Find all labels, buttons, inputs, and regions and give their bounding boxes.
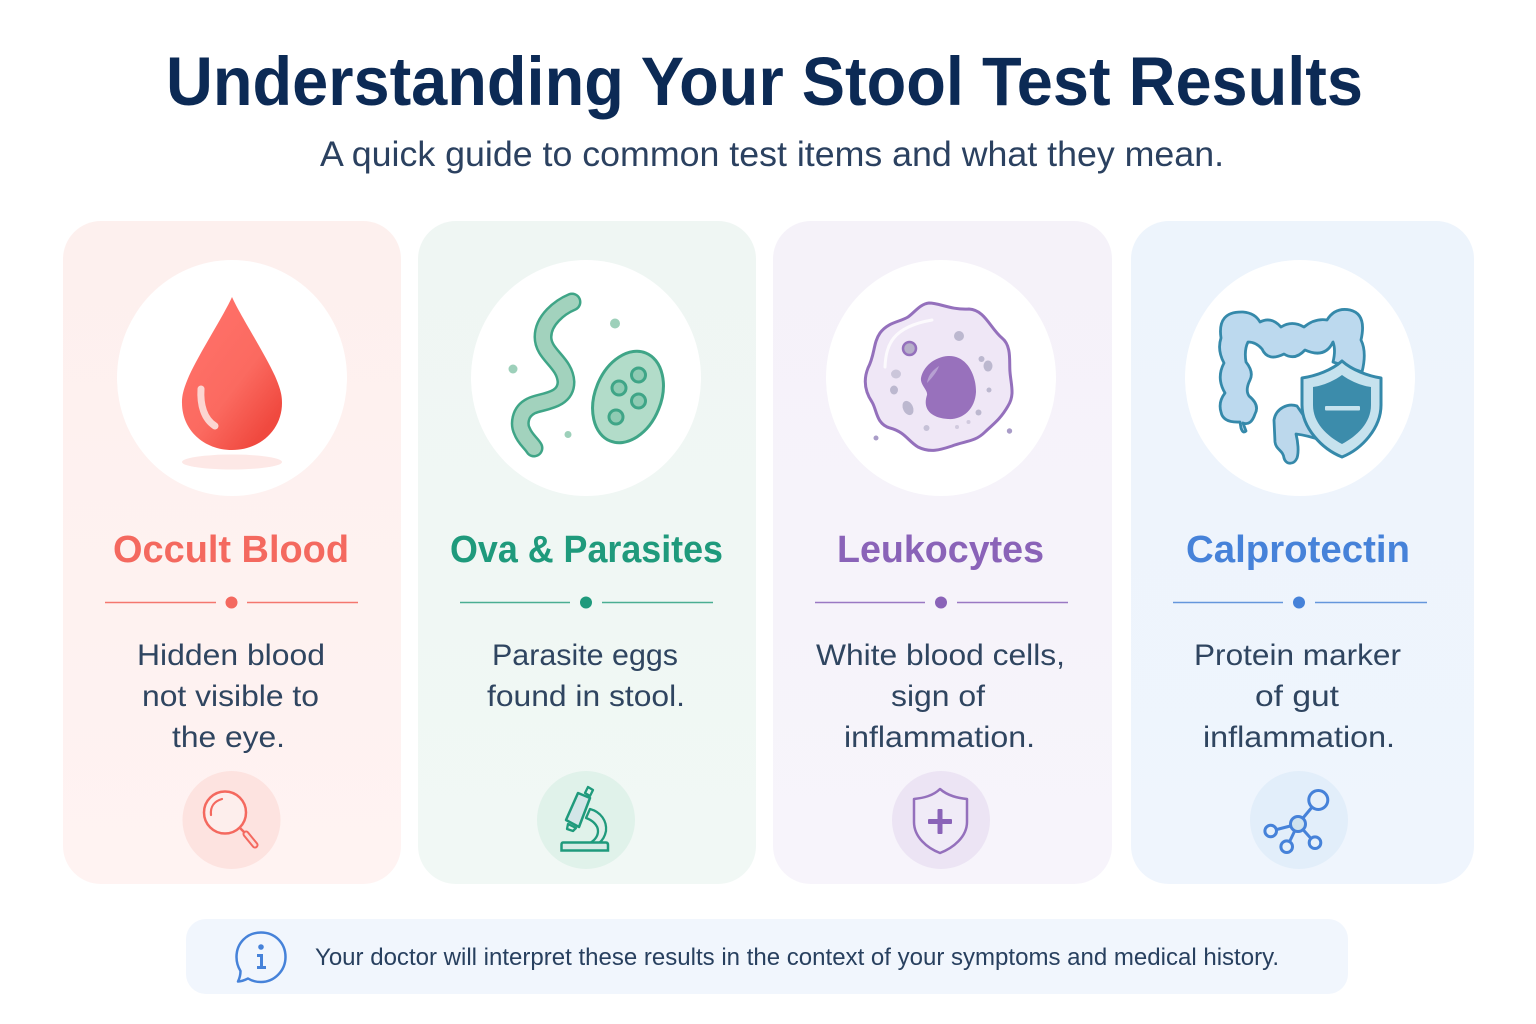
title: Understanding Your Stool Test Results (166, 43, 1363, 120)
description: ova and parasites: Parasite eggs (492, 639, 678, 672)
panel: calprotectin (1131, 221, 1474, 884)
icon circle: colon with shield (1185, 260, 1415, 496)
panel: ova and parasites (418, 221, 756, 884)
icon: microscope (537, 771, 635, 869)
description: ova and parasites (487, 639, 685, 713)
divider: ova and parasites (460, 596, 713, 608)
subtitle: A quick guide to common test items and what they mean. (320, 135, 1224, 174)
icon: magnifier (182, 771, 280, 869)
divider: occult blood (105, 596, 358, 608)
callout: doctor note (186, 919, 1348, 994)
description: occult blood (137, 639, 325, 754)
panel: occult blood (63, 221, 401, 884)
icon circle: white blood cell (826, 260, 1056, 496)
divider: leukocytes (815, 596, 1068, 608)
icon: molecule network (1250, 771, 1348, 869)
icon circle: blood drop (117, 260, 347, 496)
description: occult blood: the eye. (172, 721, 285, 754)
description: leukocytes: inflammation. (844, 721, 1035, 754)
heading: calprotectin: Calprotectin (1186, 529, 1410, 571)
description: calprotectin: Protein marker (1194, 639, 1401, 672)
panel: leukocytes (773, 221, 1112, 884)
description: leukocytes: sign of (891, 680, 986, 713)
description: calprotectin (1194, 639, 1401, 754)
heading: leukocytes: Leukocytes (837, 529, 1044, 571)
heading: occult blood: Occult Blood (113, 529, 349, 571)
description: leukocytes (816, 639, 1065, 754)
description: occult blood: Hidden blood (137, 639, 325, 672)
description: calprotectin: of gut (1255, 680, 1340, 713)
divider: calprotectin (1173, 596, 1427, 608)
heading: ova and parasites: Ova & Parasites (450, 529, 723, 571)
icon circle: parasites (471, 260, 701, 496)
description: ova and parasites: found in stool. (487, 680, 685, 713)
description: occult blood: not visible to (142, 680, 319, 713)
icon: shield with plus (892, 771, 990, 869)
description: calprotectin: inflammation. (1203, 721, 1395, 754)
callout text: Your doctor will interpret these results in the context of your symptoms and medical history. (315, 944, 1279, 971)
icon: info speech bubble (236, 932, 286, 982)
description: leukocytes: White blood cells, (816, 639, 1065, 672)
